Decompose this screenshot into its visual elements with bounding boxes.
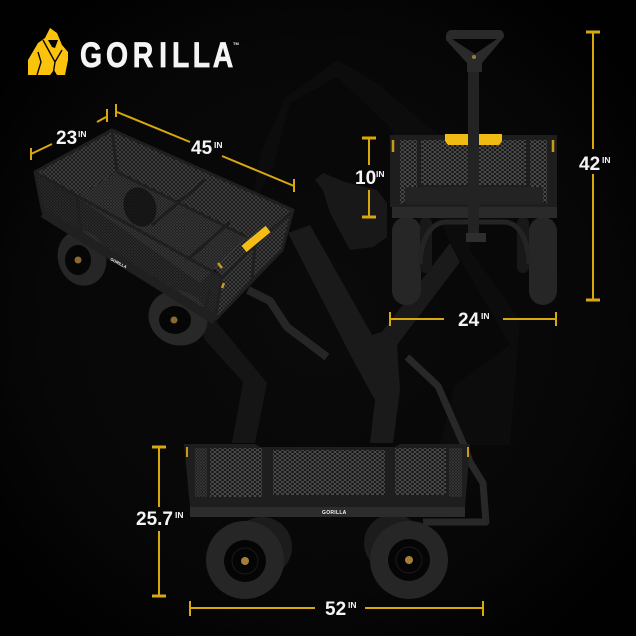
yellow grip — [244, 229, 268, 249]
side strips — [195, 448, 462, 497]
front hub right — [388, 539, 430, 581]
back walls — [35, 130, 293, 277]
end wall — [215, 210, 293, 320]
body — [184, 444, 470, 507]
rear wheel — [51, 224, 113, 292]
side panels — [400, 140, 547, 204]
floor braces — [152, 180, 230, 262]
mesh center — [273, 450, 385, 495]
dimension: 25.7 in: IN — [175, 510, 184, 520]
rear wheels — [232, 514, 422, 577]
pole — [468, 68, 479, 236]
dimension: 24 in: IN — [481, 311, 490, 321]
body — [390, 135, 557, 207]
center block — [466, 233, 486, 242]
floor — [405, 187, 543, 204]
side rail — [43, 213, 215, 320]
frame rail — [190, 507, 465, 517]
dimension: 10 in — [355, 138, 384, 217]
cart brand: GORILLA — [110, 256, 128, 269]
dimension: 45 in: IN — [214, 140, 222, 150]
dimension: 52 in: IN — [348, 600, 356, 610]
yellow grip — [445, 134, 502, 145]
dimension: 23 in: IN — [78, 129, 86, 139]
dimension: 24 in — [390, 310, 556, 331]
yellow latches — [218, 263, 224, 288]
dimension: 52 in — [190, 599, 483, 620]
icon: gorilla — [28, 28, 68, 75]
logo — [28, 28, 233, 75]
dimension: 25.7 in — [136, 447, 184, 596]
side view wagon — [184, 357, 486, 599]
trademark: TM — [233, 41, 239, 46]
perspective wagon — [35, 130, 327, 357]
frame rails — [35, 130, 293, 320]
gorilla watermark — [195, 60, 520, 445]
front hub left — [224, 540, 266, 582]
yellow latches — [187, 447, 468, 457]
tires — [392, 217, 557, 305]
near side wall — [35, 172, 222, 320]
t-handle — [446, 30, 504, 72]
frame rail — [392, 207, 557, 218]
dimension: 52 in: 52 — [325, 599, 346, 620]
front wheel — [139, 281, 217, 355]
mesh right — [395, 448, 446, 495]
dimension: 45 in — [116, 104, 294, 192]
axle arch — [420, 222, 529, 264]
wordmark: GORILLA — [80, 35, 233, 75]
dimension: 42 in — [579, 32, 610, 300]
handle bolt — [472, 55, 476, 59]
dimension: 25.7 in: 25.7 — [136, 509, 173, 530]
dimension: 42 in: 42 — [579, 154, 600, 175]
dimension: 42 in: IN — [602, 155, 610, 165]
mesh left — [210, 448, 262, 497]
dimension: 45 in: 45 — [191, 138, 213, 159]
handle — [407, 357, 486, 522]
mesh panel — [421, 140, 526, 185]
floor — [77, 172, 247, 283]
cart brand: GORILLA — [322, 510, 347, 516]
front tire left — [206, 521, 284, 599]
dimension: 23 in: 23 — [56, 128, 77, 149]
icon lines — [37, 40, 62, 75]
floor shadow wheel — [118, 183, 162, 231]
front view wagon — [390, 30, 557, 305]
dimension: 10 in: 10 — [355, 168, 376, 189]
dimension: 24 in: 24 — [458, 310, 480, 331]
pull handle — [248, 290, 327, 357]
dimension: 10 in: IN — [376, 169, 384, 179]
front tire right — [370, 521, 448, 599]
yellow latches — [393, 140, 553, 152]
dimension: 23 in — [31, 109, 107, 160]
